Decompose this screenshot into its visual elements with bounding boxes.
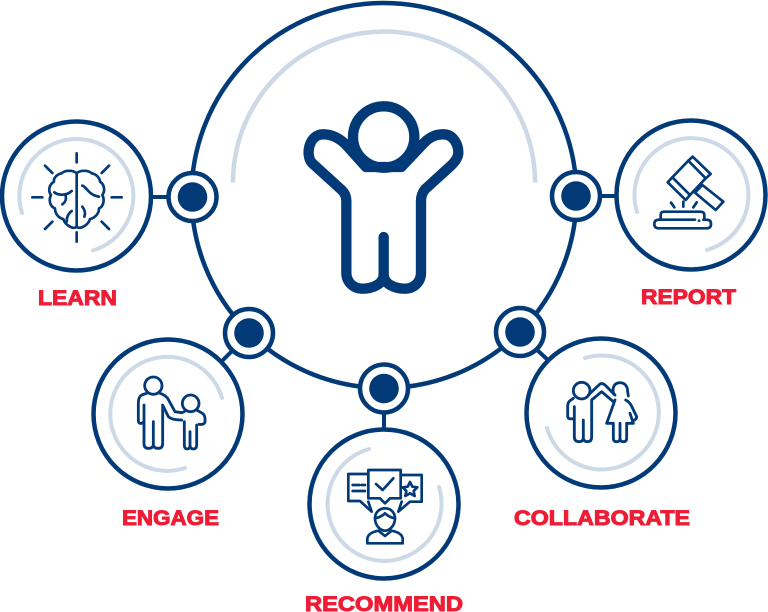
main circle — [192, 3, 576, 388]
panel: engage — [94, 340, 242, 488]
icon: gavel — [654, 157, 723, 228]
panel: collaborate — [526, 338, 676, 488]
connector: learn — [150, 195, 170, 199]
label: learn: LEARN — [38, 287, 117, 310]
icon: man and woman joining hands — [568, 382, 637, 442]
connector: engage — [222, 348, 235, 361]
label: collaborate: COLLABORATE — [514, 507, 690, 530]
panel: report — [616, 120, 766, 270]
label: engage: ENGAGE — [122, 507, 219, 530]
main light arc — [233, 32, 535, 182]
icon: central person with raised arms — [309, 106, 458, 289]
connector: recommend — [382, 410, 386, 431]
icon: adult holding child's hand — [138, 377, 205, 449]
panel: learn — [2, 122, 151, 270]
icon: person with review speech bubbles — [348, 470, 422, 543]
icon: brain — [32, 153, 122, 242]
label: report: REPORT — [641, 286, 736, 309]
node: report — [552, 172, 600, 220]
node: recommend — [360, 364, 408, 412]
node: collaborate — [496, 308, 544, 356]
panel: recommend — [310, 430, 458, 578]
connector: report — [598, 194, 618, 198]
node: learn — [168, 173, 216, 221]
connector: collaborate — [535, 348, 549, 361]
node: engage — [225, 309, 273, 357]
